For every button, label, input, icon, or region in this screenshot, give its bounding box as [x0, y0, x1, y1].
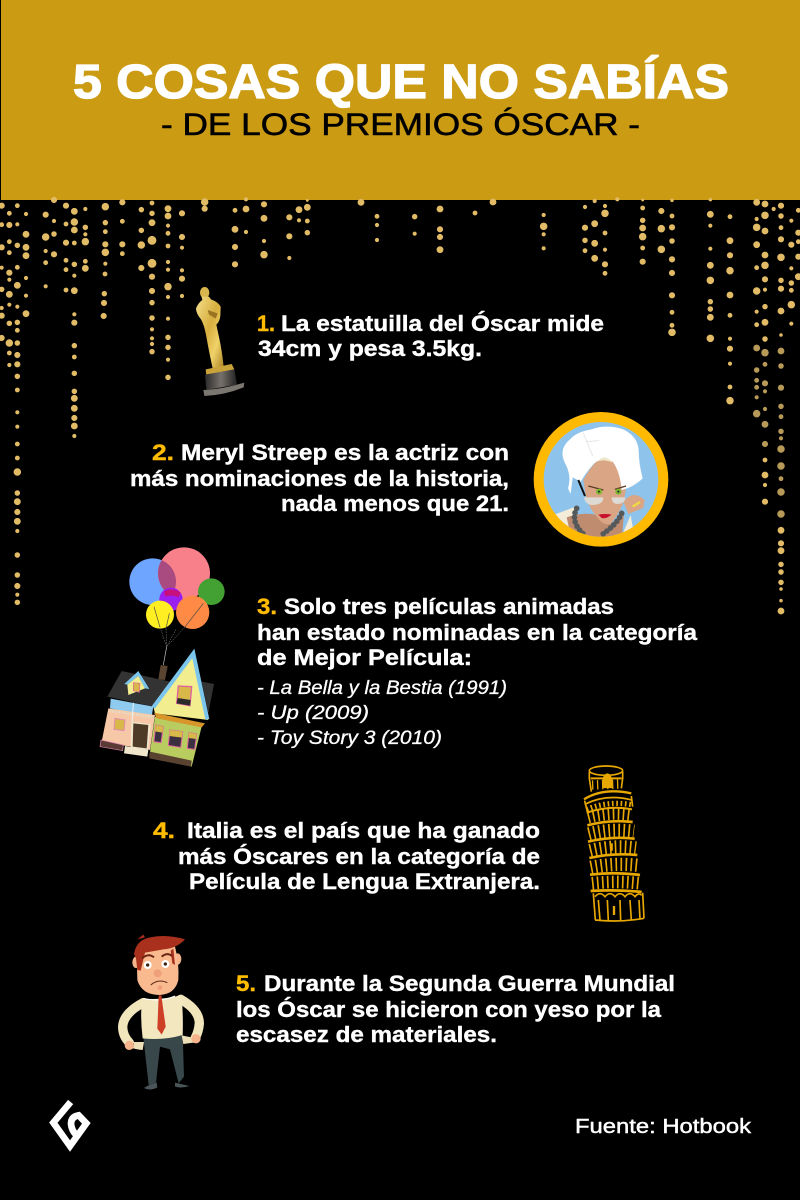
gold falling dots: [0, 197, 800, 614]
statement 2: nada menos que 21.: [281, 491, 509, 516]
statement 4: Película de Lengua Extranjera.: [189, 869, 540, 894]
statement 4: [153, 818, 540, 894]
statement 3: 3.: [257, 594, 277, 619]
film list: [257, 677, 507, 749]
statement 1: 34cm y pesa 3.5kg.: [258, 336, 482, 361]
statement 2: más nominaciones de la historia,: [130, 466, 509, 491]
film list: - Toy Story 3 (2010): [257, 727, 442, 749]
statement 3: [257, 594, 698, 749]
statement 2: 2.: [152, 440, 174, 465]
film list: - Up (2009): [257, 702, 369, 724]
statement 5: 5.: [236, 971, 256, 996]
icon: Oscar statuette: [196, 287, 244, 396]
statement 1: 1.: [257, 311, 275, 336]
statement 5: los Óscar se hicieron con yeso por la: [236, 997, 662, 1022]
icon: Up house with balloons: [100, 547, 225, 767]
statement 3: Solo tres películas animadas: [284, 594, 614, 619]
house: [100, 647, 214, 767]
statement 3: han estado nominadas en la categoría: [257, 620, 698, 645]
film list: - La Bella y la Bestia (1991): [257, 677, 507, 699]
statement 1: [257, 311, 604, 361]
logo: [53, 1102, 86, 1146]
statement 4: 4.: [153, 818, 175, 843]
statement 5: escasez de materiales.: [236, 1022, 497, 1047]
statement 2: Meryl Streep es la actriz con: [181, 440, 509, 465]
statement 3: de Mejor Película:: [257, 645, 472, 670]
source: Fuente: Hotbook: [575, 1116, 752, 1138]
statement 1: La estatuilla del Óscar mide: [281, 311, 604, 336]
icon: Meryl Streep portrait: [534, 412, 668, 547]
header band: [1, 0, 800, 200]
icon: man with empty pockets: [123, 935, 201, 1090]
statement 5: Durante la Segunda Guerra Mundial: [264, 971, 675, 996]
balloons: [129, 547, 225, 647]
statement 2: [130, 440, 509, 516]
title: 5 COSAS QUE NO SABÍAS: [73, 55, 729, 109]
statement 4: Italia es el país que ha ganado: [187, 818, 540, 843]
subtitle: - DE LOS PREMIOS ÓSCAR -: [161, 106, 640, 142]
statement 5: [236, 971, 675, 1047]
icon: Tower of Pisa: [584, 766, 644, 921]
statement 4: más Óscares en la categoría de: [178, 844, 540, 869]
